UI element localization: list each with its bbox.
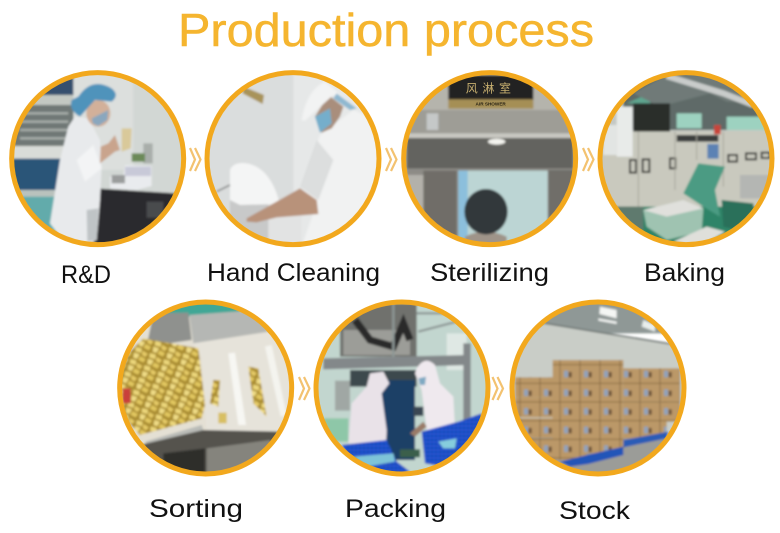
photo circle: baking line <box>597 70 777 247</box>
panel: Hand Cleaning <box>205 70 383 287</box>
photo circle: packing workers <box>313 300 493 480</box>
ring <box>404 73 576 245</box>
photo circle: sorting trays <box>117 300 297 480</box>
label: Baking: Baking <box>644 259 725 287</box>
ring <box>600 73 772 245</box>
label: Hand Cleaning: Hand Cleaning <box>207 259 380 287</box>
ring <box>120 302 292 474</box>
panel: Sterilizing <box>400 70 580 287</box>
photo circle: lab researcher <box>10 70 187 250</box>
label: Sorting: Sorting <box>149 495 243 523</box>
arrow 1 <box>190 148 200 171</box>
arrow 4 <box>299 377 310 400</box>
panel: Baking <box>597 70 777 287</box>
sign text: 风淋室 <box>466 80 516 95</box>
ring <box>12 73 184 245</box>
title: Production process <box>178 4 594 56</box>
arrow 5 <box>492 377 503 400</box>
label: Sterilizing: Sterilizing <box>430 259 549 287</box>
panel: R&D <box>10 70 187 289</box>
photo circle: warehouse boxes <box>510 300 687 477</box>
arrow 3 <box>583 148 594 171</box>
panel: Stock <box>510 300 687 525</box>
ring <box>512 302 684 474</box>
label: R&D: R&D <box>61 261 111 289</box>
arrow 2 <box>386 148 396 171</box>
photo circle: air shower room: AIR SHOWER <box>476 102 506 107</box>
panel: Sorting <box>117 300 297 523</box>
panel: Packing <box>313 300 493 523</box>
photo circle: hand dryer <box>205 70 383 247</box>
label: Packing: Packing <box>345 495 446 523</box>
photo circle: air shower room <box>400 70 580 247</box>
ring <box>207 73 379 245</box>
ring <box>316 302 488 474</box>
label: Stock: Stock <box>559 497 631 525</box>
